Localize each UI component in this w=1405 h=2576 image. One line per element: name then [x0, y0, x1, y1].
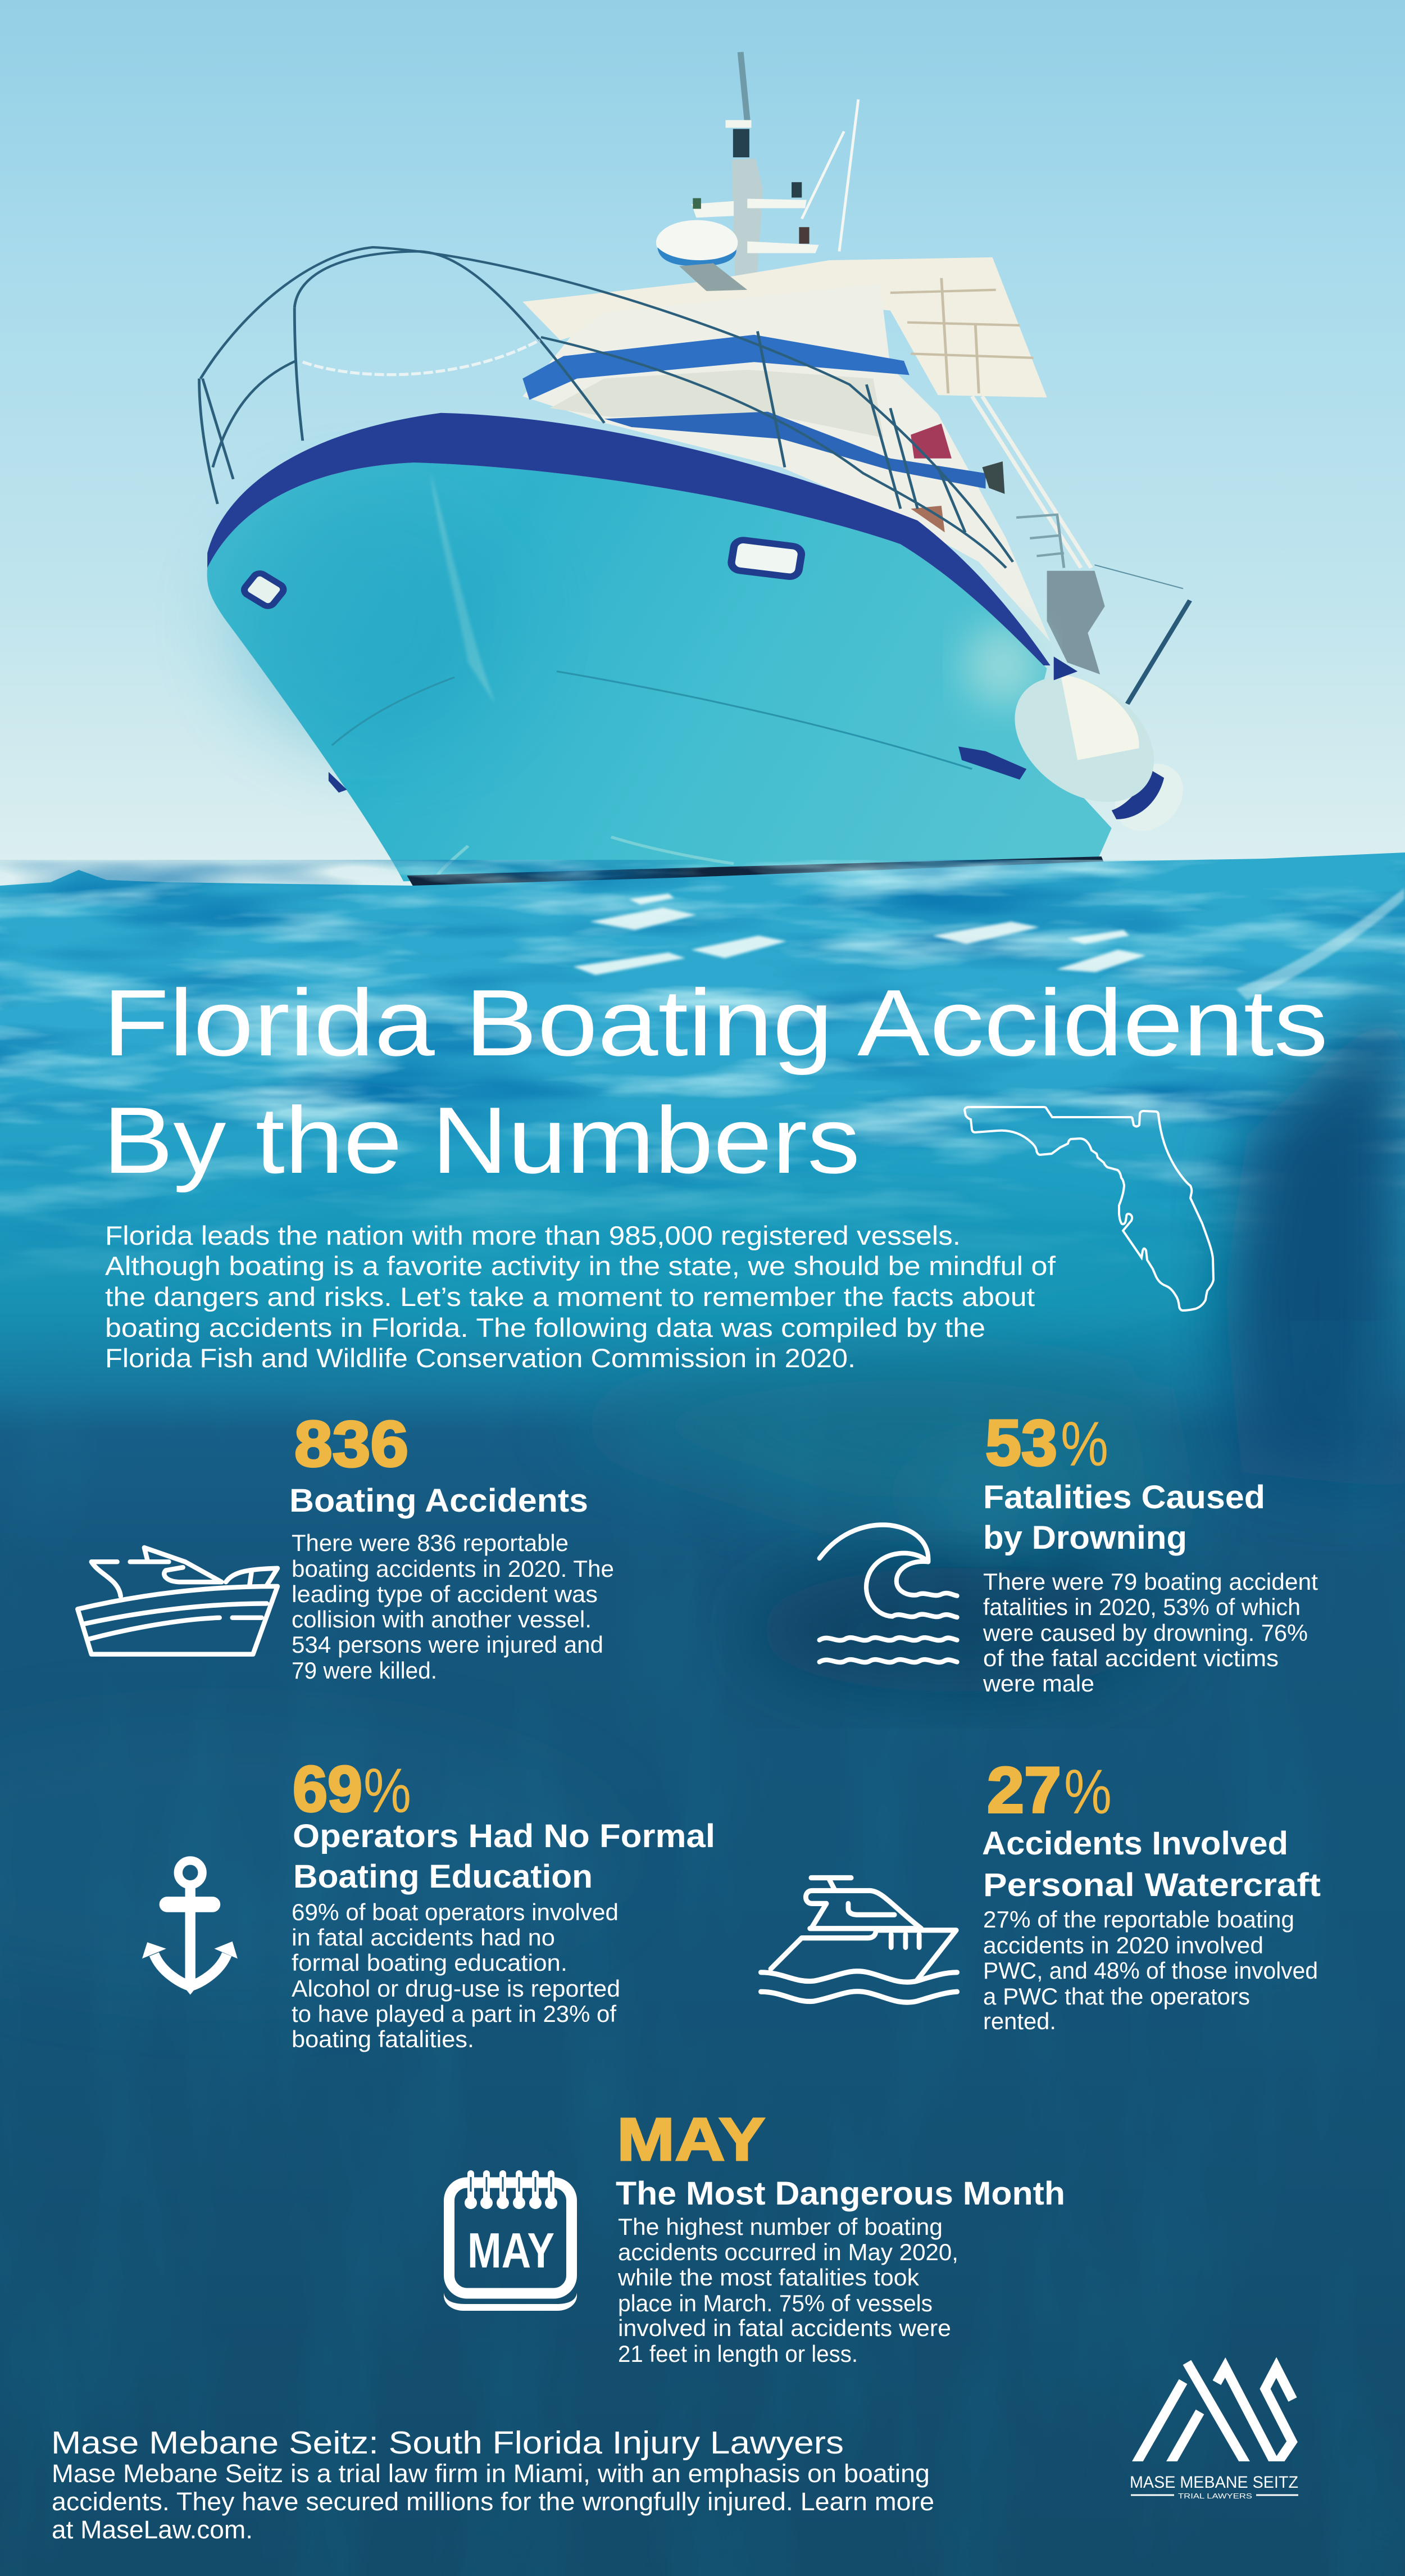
intro paragraph [105, 1221, 1056, 1373]
body text: were male [983, 1670, 1094, 1697]
body text: 534 persons were injured and [292, 1631, 603, 1658]
body text: accidents in 2020 involved [983, 1932, 1263, 1958]
logo tagline: TRIAL LAWYERS [1178, 2492, 1252, 2500]
stat: 53% fatalities caused by drowning [983, 1407, 1318, 1697]
body text: of the fatal accident victims [983, 1645, 1279, 1671]
intro paragraph: Florida Fish and Wildlife Conservation Commission in 2020. [105, 1343, 856, 1373]
title [103, 970, 1328, 1193]
icon: calendar: MAY [467, 2223, 554, 2278]
footer body text: Mase Mebane Seitz is a trial law firm in Miami, with an emphasis on boating [52, 2459, 930, 2488]
body text [983, 1568, 1318, 1697]
anchor chain [303, 340, 540, 375]
icon: boat line art [78, 1548, 278, 1654]
title: Florida Boating Accidents [103, 970, 1328, 1076]
body text: involved in fatal accidents were [618, 2315, 951, 2341]
body text: in fatal accidents had no [292, 1924, 555, 1951]
intro paragraph: Although boating is a favorite activity in the state, we should be mindful of [105, 1251, 1056, 1281]
body text: collision with another vessel. [292, 1606, 592, 1632]
stat: May, the most dangerous month [616, 2105, 1065, 2367]
sun glints on water [0, 888, 1404, 1321]
body text: 69% of boat operators involved [292, 1899, 619, 1925]
body text: formal boating education. [292, 1949, 567, 1976]
footer body text: accidents. They have secured millions for the wrongfully injured. Learn more [52, 2487, 934, 2516]
boat mast and antennas [692, 52, 858, 281]
intro paragraph: Florida leads the nation with more than 985,000 registered vessels. [105, 1221, 961, 1250]
footer body text: at MaseLaw.com. [52, 2515, 253, 2544]
boat canopy and cabin [522, 257, 1105, 674]
icon: wave [820, 1525, 957, 1662]
stat: 69% operators had no formal boating education [292, 1753, 715, 2052]
hull highlights and creases [237, 473, 1040, 876]
heading: Boating Accidents: Boating Accidents [289, 1482, 588, 1519]
number: 53%: 53 [985, 1407, 1057, 1479]
body text: There were 836 reportable [292, 1530, 569, 1556]
body text: accidents occurred in May 2020, [618, 2239, 958, 2265]
photo: boat on the water [199, 52, 1197, 887]
heading: Fatalities Caused by Drowning: Fatalities Caused [983, 1479, 1265, 1516]
body text: place in March. 75% of vessels [618, 2290, 933, 2316]
body text: 21 feet in length or less. [618, 2341, 858, 2367]
logo rule lines [1131, 2494, 1298, 2496]
heading: Accidents Involved Personal Watercraft [982, 1825, 1321, 1903]
number: 69%: % [363, 1756, 411, 1826]
porthole windows [242, 539, 803, 609]
heading: The Most Dangerous Month: The Most Dangerous Month [616, 2175, 1065, 2212]
number: 27% [987, 1754, 1112, 1827]
radar dome [656, 220, 747, 291]
boat railings [199, 247, 1013, 568]
body text: Alcohol or drug-use is reported [292, 1975, 620, 2002]
number: 69% [293, 1753, 411, 1826]
body text: while the most fatalities took [617, 2264, 920, 2291]
heading: Fatalities Caused by Drowning: by Drowning [983, 1520, 1187, 1556]
water surface ripples [0, 860, 1405, 1309]
body text [292, 1530, 614, 1684]
fenders and pole [329, 565, 1197, 842]
body text: a PWC that the operators [983, 1983, 1250, 2010]
footer body text [52, 2459, 934, 2544]
icon: anchor [142, 1861, 238, 1995]
number: 53% [985, 1407, 1108, 1479]
body text: to have played a part in 23% of [292, 2001, 616, 2027]
stat: 27% accidents involved personal watercraft [982, 1754, 1321, 2034]
number: MAY: MAY [617, 2105, 765, 2173]
heading: Operators Had No Formal Boating Education: Operators Had No Formal [293, 1818, 715, 1854]
body text: were caused by drowning. 76% [983, 1620, 1308, 1646]
hull blue gunwale band [207, 413, 1051, 665]
hull waterline [407, 856, 1105, 887]
footer firm description [51, 2425, 934, 2544]
body text: rented. [983, 2008, 1056, 2034]
water background [0, 852, 1405, 2576]
boat hull [207, 462, 1112, 881]
icon: yacht on waves [761, 1878, 957, 2002]
logo: Mase Mebane Seitz [1130, 2362, 1298, 2500]
heading: Fatalities Caused by Drowning [983, 1479, 1265, 1556]
body text: leading type of accident was [292, 1581, 598, 1607]
icon: Florida state outline [965, 1107, 1213, 1310]
body text: 79 were killed. [292, 1657, 437, 1684]
heading: Operators Had No Formal Boating Education: Boating Education [293, 1858, 593, 1895]
body text: 27% of the reportable boating [983, 1906, 1294, 1933]
body text [983, 1906, 1318, 2034]
title: By the Numbers [103, 1087, 860, 1193]
body text: There were 79 boating accident [983, 1568, 1318, 1595]
body text: PWC, and 48% of those involved [983, 1957, 1318, 1984]
body text: boating fatalities. [292, 2026, 474, 2052]
deep water tone shapes [0, 983, 1405, 1989]
body text: fatalities in 2020, 53% of which [983, 1594, 1301, 1620]
intro paragraph: the dangers and risks. Let’s take a moment to remember the facts about [105, 1282, 1035, 1312]
body text: The highest number of boating [618, 2214, 943, 2240]
sky background [0, 0, 1405, 899]
logo wordmark: MASE MEBANE SEITZ [1130, 2473, 1298, 2492]
body text: boating accidents in 2020. The [292, 1555, 614, 1582]
deep water texture [0, 1321, 1405, 2576]
heading: Accidents Involved Personal Watercraft: Accidents Involved [982, 1825, 1288, 1862]
body text [617, 2214, 958, 2367]
heading: Operators Had No Formal Boating Education [293, 1818, 715, 1895]
number: 836: 836 [294, 1408, 408, 1480]
number: 53%: % [1061, 1409, 1108, 1479]
intro paragraph: boating accidents in Florida. The following data was compiled by the [105, 1313, 985, 1343]
heading: Accidents Involved Personal Watercraft: Personal Watercraft [983, 1867, 1321, 1903]
icon: calendar [444, 2174, 577, 2311]
number: 69%: 69 [293, 1753, 362, 1825]
number: 27%: % [1064, 1757, 1112, 1827]
body text [292, 1899, 620, 2052]
number: 27%: 27 [987, 1754, 1061, 1826]
footer heading: Mase Mebane Seitz: South Florida Injury Lawyers [51, 2425, 844, 2461]
logo mark [1134, 2362, 1293, 2468]
stat: 836 boating accidents [289, 1408, 614, 1684]
